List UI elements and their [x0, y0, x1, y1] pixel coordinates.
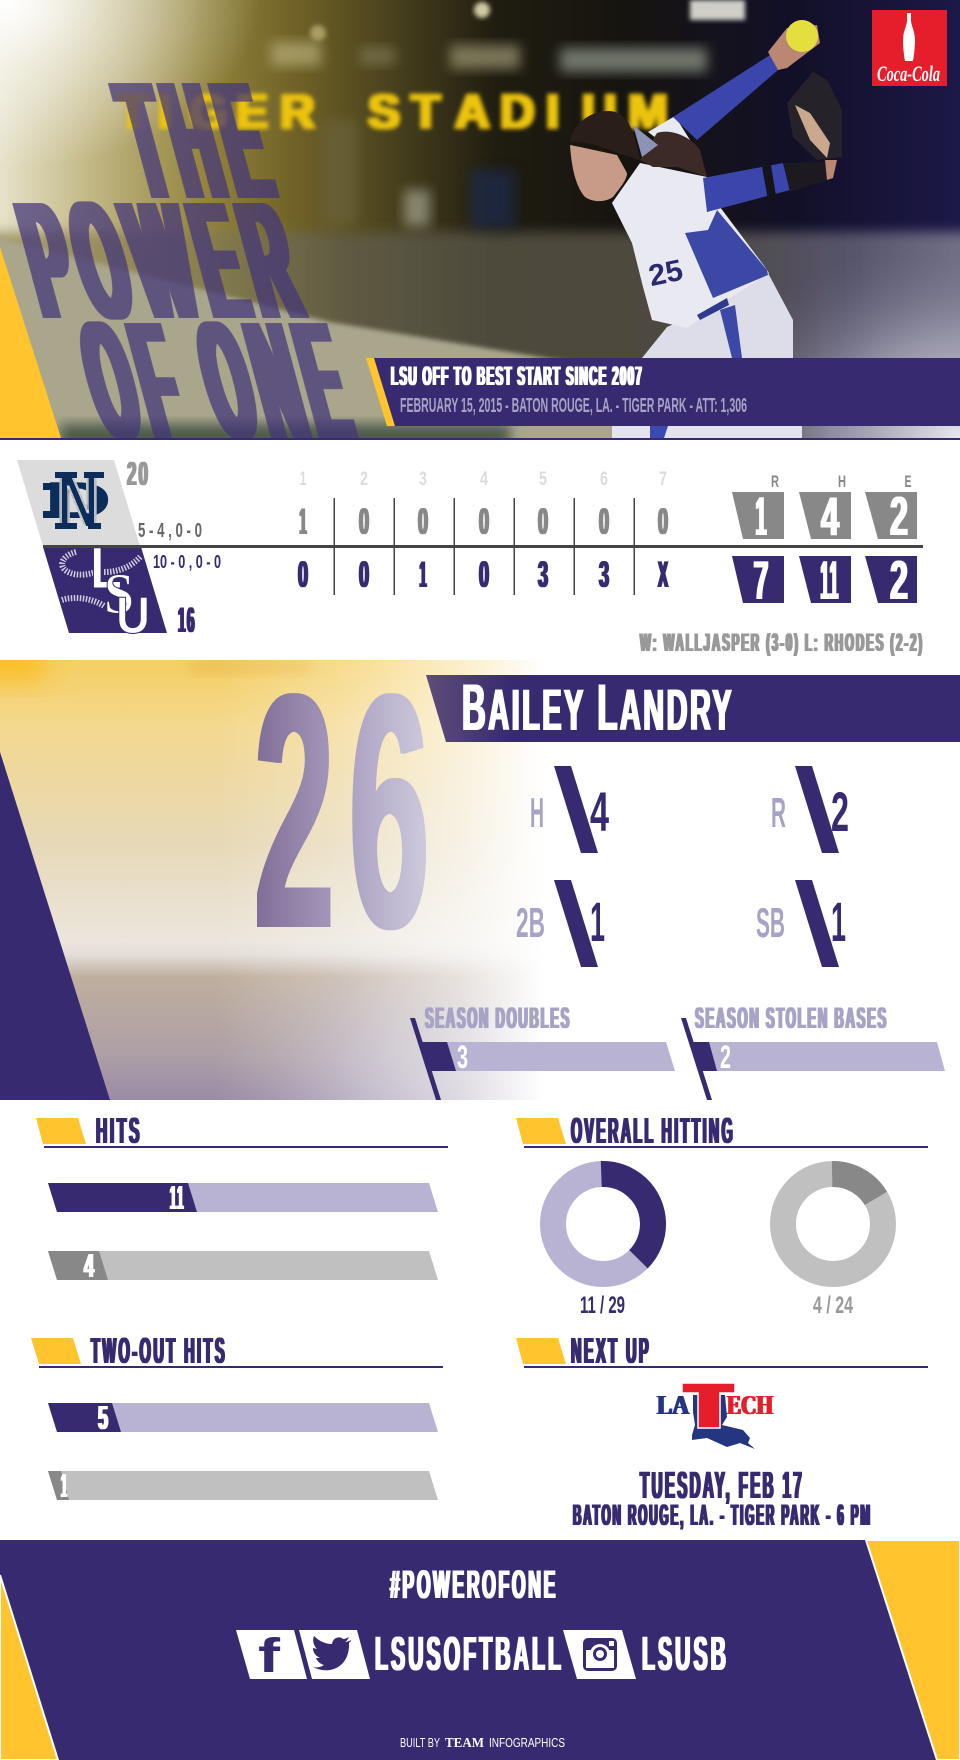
donut: notre dame hitting: 4 / 24 [813, 1292, 853, 1319]
bar: notre dame hits [48, 1247, 438, 1284]
logo: louisiana tech [657, 1383, 773, 1449]
yellow corner wedge [0, 247, 61, 438]
lsu team block [43, 536, 221, 645]
heading: hits: HITS [96, 1110, 142, 1151]
panel: player spotlight: 1 [590, 890, 605, 953]
logo: notre dame: D [45, 472, 111, 530]
logo: louisiana tech: ECH [727, 1390, 773, 1420]
lsu inning scores: 0 [479, 554, 489, 595]
bar: lsu hits [48, 1179, 438, 1216]
stat: doubles: 2B [516, 899, 545, 946]
season doubles bar: 3 [457, 1039, 468, 1075]
heading: hits [36, 1110, 448, 1151]
logo: lsu: U [116, 587, 150, 645]
icon: facebook: f [258, 1630, 281, 1683]
notre dame rhe totals: 4 [821, 485, 839, 547]
donut: notre dame hitting [782, 1173, 884, 1319]
panel: two-out hits [31, 1330, 443, 1504]
notre dame record: 5 - 4 , 0 - 0 [138, 520, 202, 542]
stat: hits [530, 766, 609, 853]
credit line: TEAM [445, 1736, 484, 1751]
icon: facebook [236, 1630, 307, 1683]
credit line: INFOGRAPHICS [489, 1735, 565, 1750]
inning headers: 7 [659, 469, 667, 490]
panel: player spotlight: 26 [254, 626, 444, 997]
notre dame rank: 20 [127, 455, 150, 492]
season stolen bases bar [681, 1002, 945, 1100]
inning headers: 6 [600, 469, 608, 490]
player illustration: pitcher: 25 [646, 254, 686, 293]
logo: lsu [62, 536, 150, 645]
rhe headers: E [904, 472, 912, 491]
lsu inning scores [298, 554, 668, 595]
stat: runs: R [771, 789, 786, 836]
stat: hits: H [530, 789, 544, 836]
logo: louisiana tech: LA [657, 1390, 689, 1420]
notre dame inning scores [300, 501, 668, 542]
panel: footer: #POWEROFONE [390, 1563, 558, 1607]
notre dame inning scores: 0 [538, 501, 548, 542]
panel: player spotlight: 1 [831, 890, 846, 953]
logo: lsu: L [90, 536, 122, 601]
hero photo background: TIGERSTADIUM [118, 86, 668, 139]
lsu rhe totals: 7 [754, 549, 768, 611]
season doubles bar [410, 1002, 675, 1100]
player name banner [426, 670, 960, 744]
inning headers: 4 [480, 469, 488, 490]
panel: line score [17, 455, 924, 657]
title: the power of one: THE [103, 48, 297, 234]
rhe headers [771, 472, 912, 491]
panel: player spotlight [0, 626, 960, 1120]
lsu rhe totals: 2 [890, 549, 908, 611]
player photo background [0, 660, 532, 1100]
lsu rhe totals [732, 549, 917, 611]
hero panel: POWER [4, 168, 326, 354]
donut: lsu hitting [551, 1172, 655, 1319]
inning headers: 5 [539, 469, 547, 490]
inning headers: 1 [300, 469, 307, 490]
panel: next up [516, 1330, 928, 1532]
bar: notre dame two-out hits [48, 1467, 438, 1504]
bar: lsu two-out hits: 5 [98, 1399, 108, 1436]
lsu team block: 16 [178, 601, 196, 640]
player illustration: pitcher [570, 20, 842, 438]
stat: runs [771, 766, 849, 853]
lsu inning scores: 1 [420, 554, 426, 595]
panel: footer: LSUSB [642, 1628, 729, 1681]
lsu inning scores: 3 [599, 554, 609, 595]
lsu record: 10 - 0 , 0 - 0 [153, 552, 221, 572]
bar: lsu two-out hits [48, 1399, 438, 1436]
heading: next up: NEXT UP [571, 1330, 651, 1371]
hero panel [0, 0, 960, 474]
icon: twitter [299, 1630, 370, 1679]
stat: hits: 4 [590, 780, 609, 843]
stat: runs: 2 [831, 780, 849, 843]
panel: hits [36, 1110, 448, 1284]
rhe headers: R [771, 472, 779, 491]
heading: two-out hits: TWO-OUT HITS [91, 1330, 227, 1371]
purple wedge [0, 752, 110, 1100]
notre dame inning scores: 0 [359, 501, 369, 542]
credit line: BUILT BY [400, 1735, 440, 1750]
lsu inning scores: 3 [538, 554, 548, 595]
player name: BAILEY LANDRY [462, 670, 734, 744]
notre dame inning scores: 1 [300, 501, 306, 542]
panel: footer [0, 1540, 960, 1760]
notre dame team block [17, 455, 202, 546]
panel: footer: LSUSOFTBALL [375, 1628, 564, 1681]
stat: stolen bases [756, 880, 846, 967]
hero photo background [0, 0, 960, 472]
bar: notre dame hits: 4 [84, 1247, 94, 1284]
hero panel: OF ONE [65, 288, 375, 474]
notre dame inning scores: 0 [599, 501, 609, 542]
notre dame inning scores: 0 [479, 501, 489, 542]
inning headers: 2 [360, 469, 368, 490]
bar: lsu hits: 11 [170, 1179, 185, 1216]
lsu inning scores: 0 [298, 554, 308, 595]
lsu inning scores: 0 [359, 554, 369, 595]
headline bar [366, 358, 960, 426]
hero bottom rule [0, 438, 960, 440]
scoreboard dividers [43, 498, 923, 595]
title: the power of one [12, 83, 359, 438]
notre dame inning scores: 0 [418, 501, 428, 542]
inning headers [300, 469, 667, 490]
panel: overall hitting [516, 1110, 928, 1319]
notre dame rhe totals: 1 [756, 485, 766, 547]
bar: notre dame two-out hits: 1 [61, 1467, 67, 1504]
credit line [400, 1735, 565, 1751]
logo: notre dame: N [57, 455, 99, 543]
stat: doubles [516, 880, 605, 967]
rhe headers: H [838, 472, 846, 491]
stat: stolen bases: SB [756, 899, 785, 946]
heading: next up [516, 1330, 928, 1371]
notre dame rhe totals: 2 [890, 485, 908, 547]
notre dame rhe totals [732, 485, 917, 547]
left yellow wedge [0, 1575, 58, 1760]
inning headers: 3 [419, 469, 427, 490]
icon: instagram [563, 1630, 636, 1679]
sponsor logo: coca-cola [872, 10, 947, 86]
lsu rhe totals: 11 [820, 549, 840, 611]
season doubles bar: SEASON DOUBLES [425, 1002, 571, 1035]
season stolen bases bar: 2 [720, 1039, 731, 1075]
panel: line score: X [658, 554, 668, 595]
logo: lsu: S [104, 561, 134, 626]
panel: line score: 0 [658, 501, 668, 542]
donut: lsu hitting: 11 / 29 [580, 1292, 625, 1319]
right yellow wedge [866, 1540, 960, 1760]
